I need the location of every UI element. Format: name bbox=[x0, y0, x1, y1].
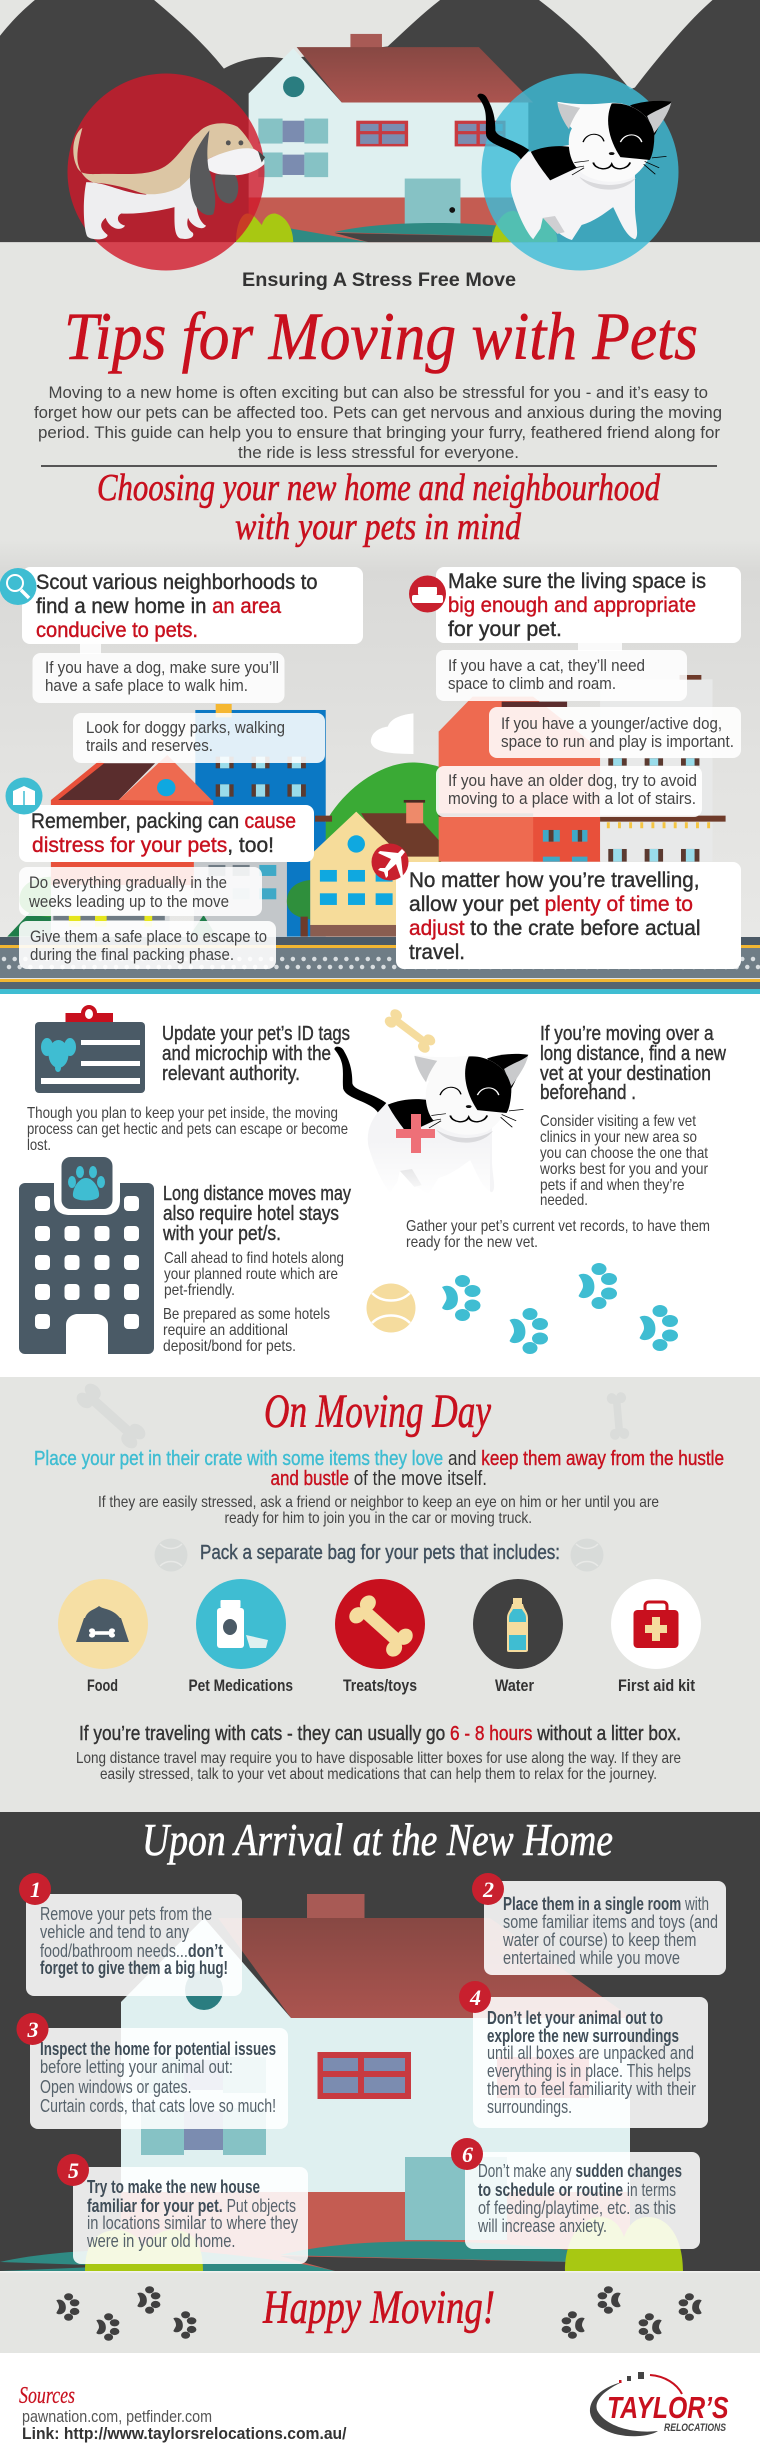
step 5 card: Try to make the new house bbox=[87, 2177, 260, 2197]
yellow house bbox=[310, 800, 439, 937]
step 5 card: were in your old home. bbox=[86, 2231, 236, 2251]
heading: pack a bag: Pack a separate bag for your pets that includes: bbox=[200, 1542, 560, 1564]
sources heading: Sources bbox=[19, 2383, 75, 2409]
panel: tip cards over town bbox=[0, 567, 741, 969]
card: cat space bbox=[436, 650, 687, 701]
step 1 card: 1 bbox=[30, 1877, 41, 1902]
text: crate advice bbox=[34, 1448, 724, 1490]
hero illustration bbox=[0, 0, 760, 270]
heading: find a new vet: If you’re moving over a bbox=[540, 1023, 714, 1045]
card: travel crate: travel. bbox=[409, 941, 465, 964]
step 1 card: Remove your pets from the bbox=[40, 1904, 212, 1924]
card: travel crate: No matter how you’re travelling, bbox=[409, 869, 700, 892]
step 1 card: forget to give them a big hug! bbox=[40, 1958, 228, 1978]
step 6 card: 6 bbox=[462, 2142, 473, 2167]
step 3 card: Open windows or gates. bbox=[40, 2077, 192, 2097]
intro paragraph: forget how our pets can be affected too. Pets can get nervous and anxious during the moving bbox=[34, 403, 722, 422]
step 4 card: until all boxes are unpacked and bbox=[487, 2043, 694, 2063]
step 4 card bbox=[459, 1981, 708, 2128]
step 3 card: Curtain cords, that cats love so much! bbox=[40, 2096, 276, 2116]
card: safe place bbox=[19, 921, 276, 969]
logo: Taylor's Relocations: TAYLOR’S bbox=[607, 2390, 729, 2425]
logo: Taylor's Relocations: RELOCATIONS bbox=[664, 2422, 727, 2434]
step 4 card: 4 bbox=[469, 1985, 481, 2010]
card: active dog bbox=[489, 707, 741, 758]
intro paragraph: Moving to a new home is often exciting but can also be stressful for you - and it’s easy to bbox=[48, 383, 708, 402]
cat with first aid cross bbox=[334, 1047, 528, 1195]
dog illustration bbox=[73, 123, 265, 239]
card: older dog bbox=[436, 766, 702, 817]
card: older dog: moving to a place with a lot of stairs. bbox=[448, 789, 696, 808]
item: treats and toys: Treats/toys bbox=[343, 1676, 417, 1695]
item: food bbox=[58, 1579, 148, 1695]
trees bbox=[7, 877, 310, 937]
card: cat space: If you have a cat, they’ll need bbox=[448, 656, 645, 675]
heading: find a new vet: long distance, find a new bbox=[540, 1043, 726, 1065]
icon: airplane bbox=[372, 844, 408, 880]
step 4 card: everything is in place. This helps bbox=[487, 2061, 691, 2081]
text: call ahead: your planned route which are bbox=[164, 1266, 338, 1283]
step 5 card bbox=[57, 2154, 308, 2264]
text: easily stressed: If they are easily stressed, ask a friend or neighbor to keep an eye on him or her until you are bbox=[98, 1494, 659, 1511]
card: living space: big enough and appropriate bbox=[448, 594, 696, 617]
icon: ID clipboard bbox=[35, 1005, 145, 1093]
icon: magnifier bbox=[0, 568, 36, 605]
red circle bbox=[68, 74, 264, 270]
heading: upon arrival: Upon Arrival at the New Home bbox=[142, 1814, 613, 1865]
card: scout neighbourhoods: find a new home in an area bbox=[36, 595, 281, 618]
heading: update ID tags bbox=[162, 1023, 350, 1085]
step 3 card bbox=[16, 2013, 288, 2129]
text: visit vet clinics bbox=[539, 1113, 709, 1209]
text: vet records: ready for the new vet. bbox=[406, 1234, 538, 1251]
blue building bbox=[195, 704, 332, 937]
text: keep pet inside: lost. bbox=[27, 1137, 51, 1154]
step 2 card bbox=[472, 1873, 726, 1975]
card: safe place: Give them a safe place to escape to bbox=[30, 927, 267, 946]
step 3 card: Inspect the home for potential issues bbox=[40, 2039, 276, 2059]
item: first aid kit: First aid kit bbox=[618, 1676, 695, 1695]
text: call ahead bbox=[164, 1250, 344, 1299]
card: living space: for your pet. bbox=[448, 618, 562, 641]
card: doggy parks: Look for doggy parks, walking bbox=[86, 718, 285, 737]
text: vet records: Gather your pet’s current vet records, to have them bbox=[406, 1218, 710, 1235]
text: easily stressed bbox=[98, 1494, 659, 1527]
text: litter boxes bbox=[76, 1750, 681, 1783]
heading: update ID tags: Update your pet’s ID tags bbox=[162, 1023, 350, 1045]
card: gradual packing: Do everything gradually in the bbox=[29, 873, 227, 892]
step 3 card: before letting your animal out: bbox=[40, 2057, 233, 2077]
card: gradual packing bbox=[19, 867, 262, 916]
icon: sofa bbox=[409, 576, 446, 612]
section heading: choosing home bbox=[97, 467, 661, 548]
text: traveling with cats: If you’re traveling with cats - they can usually go 6 - 8 hours without a litter box. bbox=[79, 1723, 681, 1745]
card: safe place: during the final packing phase. bbox=[30, 945, 234, 964]
text: deposit: require an additional bbox=[163, 1322, 288, 1339]
card: doggy parks: trails and reserves. bbox=[86, 736, 213, 755]
card: gradual packing: weeks leading up to the move bbox=[28, 892, 229, 911]
item: pet medications bbox=[188, 1579, 293, 1695]
step 2 card: Place them in a single room with bbox=[503, 1894, 709, 1914]
footer bbox=[0, 2353, 760, 2456]
item: pet medications: Pet Medications bbox=[188, 1676, 293, 1695]
heading: update ID tags: and microchip with the bbox=[162, 1043, 331, 1065]
light building right bbox=[600, 675, 726, 862]
text: visit vet clinics: clinics in your new area so bbox=[540, 1129, 697, 1146]
green hill bbox=[320, 762, 441, 883]
step 5 card: 5 bbox=[68, 2158, 79, 2183]
card: living space bbox=[436, 567, 741, 651]
cat illustration bbox=[477, 94, 671, 240]
road bbox=[0, 937, 760, 994]
salmon building bbox=[439, 697, 601, 862]
text: deposit bbox=[163, 1306, 330, 1355]
grey building bbox=[194, 862, 287, 937]
card: older dog: If you have an older dog, try to avoid bbox=[448, 771, 697, 790]
step 4 card: surroundings. bbox=[487, 2097, 572, 2117]
card: packing distress bbox=[19, 805, 314, 862]
step 6 card: to schedule or routine in terms bbox=[478, 2180, 676, 2200]
heading: on moving day: On Moving Day bbox=[264, 1385, 492, 1438]
panel: upon arrival bbox=[0, 1812, 760, 2271]
step 4 card: Don’t let your animal out to bbox=[487, 2008, 663, 2028]
text: deposit: deposit/bond for pets. bbox=[163, 1338, 296, 1355]
item: water: Water bbox=[495, 1676, 534, 1695]
heading: find a new vet bbox=[540, 1023, 726, 1104]
card: scout neighbourhoods: Scout various neighborhoods to bbox=[36, 571, 318, 594]
text: visit vet clinics: works best for you and your bbox=[539, 1161, 709, 1178]
step 1 card: food/bathroom needs...don’t bbox=[40, 1941, 223, 1961]
card: cat space: space to climb and roam. bbox=[448, 674, 616, 693]
item: food: Food bbox=[87, 1676, 118, 1695]
ghost bones and balls bbox=[74, 1381, 630, 1572]
website link: Link: http://www.taylorsrelocations.com.au/ bbox=[22, 2424, 347, 2443]
text: call ahead: Call ahead to find hotels along bbox=[164, 1250, 344, 1267]
step 5 card: in locations similar to where they bbox=[87, 2213, 298, 2233]
card: doggy parks bbox=[73, 713, 325, 763]
card: dog walking: If you have a dog, make sure you’ll bbox=[45, 658, 279, 677]
panel: happy moving band bbox=[0, 2271, 760, 2341]
town illustration bbox=[7, 675, 726, 937]
card: scout neighbourhoods bbox=[22, 567, 363, 654]
icon: hotel building bbox=[19, 1157, 154, 1354]
intro paragraph bbox=[34, 383, 722, 462]
card: dog walking: have a safe place to walk him. bbox=[45, 676, 248, 695]
intro paragraph: the ride is less stressful for everyone. bbox=[238, 443, 519, 462]
heading: happy moving: Happy Moving! bbox=[262, 2281, 495, 2334]
heading: find a new vet: vet at your destination bbox=[540, 1063, 711, 1085]
text: litter boxes: easily stressed, talk to your vet about medications that can help them to relax for the journey. bbox=[100, 1766, 657, 1783]
cloud bbox=[371, 713, 413, 754]
ball and paw prints bbox=[366, 1263, 678, 1354]
large house illustration bbox=[0, 1894, 683, 2271]
heading: update ID tags: relevant authority. bbox=[162, 1063, 300, 1085]
step 1 card bbox=[19, 1873, 242, 1996]
heading: hotel stays bbox=[162, 1183, 351, 1245]
text: vet records bbox=[406, 1218, 710, 1251]
step 4 card: explore the new surroundings bbox=[487, 2026, 679, 2046]
text: crate advice: and bustle of the move itself. bbox=[270, 1468, 487, 1490]
panel: hotel stays bbox=[19, 1157, 351, 1355]
step 5 card: familiar for your pet. Put objects bbox=[87, 2196, 296, 2216]
text: keep pet inside bbox=[27, 1105, 348, 1154]
hills and house bbox=[0, 0, 760, 242]
item: first aid kit bbox=[611, 1579, 701, 1695]
dark paw prints bbox=[56, 2286, 702, 2341]
panel: ID tags bbox=[27, 1005, 350, 1154]
step 6 card: will increase anxiety. bbox=[477, 2216, 607, 2236]
icon: teal paw bbox=[510, 1308, 548, 1354]
icon: bone bbox=[383, 1007, 437, 1055]
icon: tennis ball bbox=[366, 1284, 416, 1332]
text: keep pet inside: process can get hectic and pets can escape or become bbox=[27, 1121, 348, 1138]
icon: box bbox=[6, 778, 42, 814]
panel: new vet text bbox=[406, 1023, 726, 1251]
text: deposit: Be prepared as some hotels bbox=[163, 1306, 330, 1323]
text: visit vet clinics: needed. bbox=[540, 1192, 588, 1209]
item: water bbox=[473, 1579, 563, 1695]
heading: hotel stays: also require hotel stays bbox=[163, 1203, 339, 1225]
section heading: choosing home: with your pets in mind bbox=[235, 506, 522, 548]
logo: Taylor's Relocations bbox=[590, 2372, 729, 2436]
text: keep pet inside: Though you plan to keep your pet inside, the moving bbox=[27, 1105, 338, 1122]
item: treats and toys bbox=[335, 1579, 425, 1695]
sources list: pawnation.com, petfinder.com bbox=[22, 2407, 212, 2426]
step 6 card bbox=[451, 2138, 700, 2249]
text: visit vet clinics: you can choose the one that bbox=[540, 1145, 708, 1162]
text: visit vet clinics: pets if and when they’re bbox=[540, 1177, 685, 1194]
panel: vet cat illustration bbox=[334, 1007, 528, 1195]
card: dog walking bbox=[32, 653, 284, 703]
step 1 card: vehicle and tend to any bbox=[40, 1922, 189, 1942]
card: travel crate: allow your pet plenty of time to bbox=[409, 893, 693, 916]
step 2 card: 2 bbox=[482, 1877, 494, 1902]
icon: teal paw bbox=[578, 1263, 617, 1309]
icon: teal paw bbox=[640, 1305, 678, 1351]
step 6 card: of feeding/playtime, etc. as this bbox=[478, 2198, 676, 2218]
step 6 card: Don’t make any sudden changes bbox=[478, 2161, 682, 2181]
step 3 card: 3 bbox=[26, 2017, 38, 2042]
icon: teal paw bbox=[442, 1275, 480, 1321]
text: visit vet clinics: Consider visiting a few vet bbox=[540, 1113, 696, 1130]
text: easily stressed: ready for him to join you in the car or moving truck. bbox=[224, 1510, 532, 1527]
card: active dog: space to run and play is important. bbox=[501, 732, 734, 751]
step 2 card: entertained while you move bbox=[503, 1948, 680, 1968]
panel: on moving day bbox=[34, 1381, 724, 1783]
blue circle bbox=[482, 74, 678, 270]
red house left bbox=[51, 755, 213, 937]
main title: Tips for Moving with Pets bbox=[64, 298, 698, 374]
step 2 card: water of course) to keep them bbox=[502, 1930, 696, 1950]
card: living space: Make sure the living space is bbox=[448, 570, 706, 593]
card: active dog: If you have a younger/active dog, bbox=[501, 714, 722, 733]
white section background bbox=[0, 994, 760, 1377]
card: travel crate bbox=[396, 862, 741, 969]
card: travel crate: adjust to the crate before actual bbox=[409, 917, 700, 940]
text: call ahead: pet-friendly. bbox=[164, 1282, 235, 1299]
card: scout neighbourhoods: conducive to pets. bbox=[36, 619, 198, 642]
heading: hotel stays: Long distance moves may bbox=[163, 1183, 351, 1205]
card: packing distress: Remember, packing can cause bbox=[31, 810, 296, 833]
card: packing distress: distress for your pets, too! bbox=[32, 834, 274, 857]
heading: find a new vet: beforehand . bbox=[540, 1082, 636, 1104]
step 4 card: them to feel familiarity with their bbox=[487, 2079, 696, 2099]
heading: hotel stays: with your pet/s. bbox=[162, 1223, 281, 1245]
intro paragraph: period. This guide can help you to ensure that bringing your furry, feathered friend along for bbox=[38, 423, 720, 442]
text: crate advice: Place your pet in their crate with some items they love and keep them away from the hustle bbox=[34, 1448, 724, 1470]
subtitle: Ensuring A Stress Free Move bbox=[242, 270, 516, 291]
